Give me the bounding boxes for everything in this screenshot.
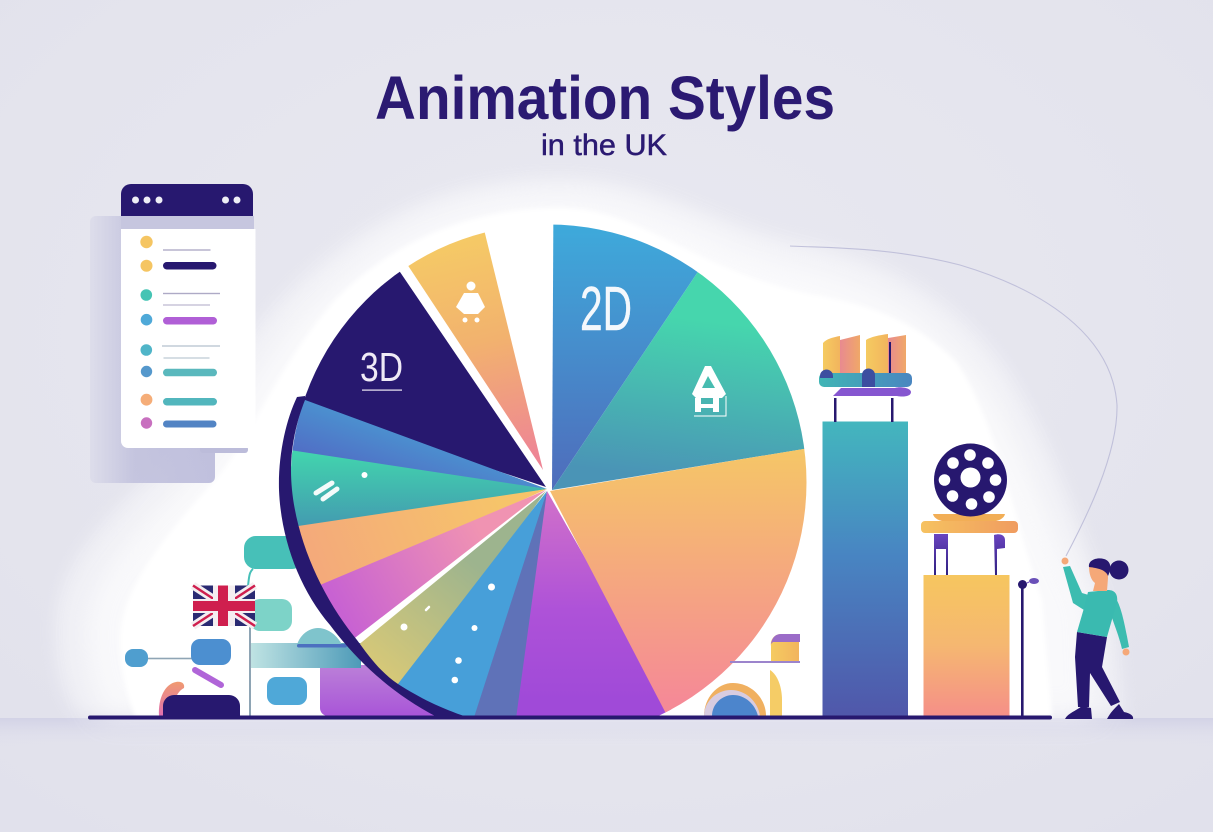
slice: blue left <box>292 400 547 489</box>
slice: teal <box>552 272 804 490</box>
ground line <box>88 716 1052 720</box>
blue node pair <box>125 639 231 667</box>
icon: figure on orange slice <box>456 282 485 322</box>
legend rows <box>140 236 220 429</box>
person hands <box>1062 558 1130 656</box>
icon: dashes and dots on teal slice <box>316 472 368 499</box>
purple pill <box>195 670 221 685</box>
purple box <box>320 665 450 716</box>
icon: bookshelf on tall bar <box>819 334 912 422</box>
person figure <box>1062 558 1133 719</box>
person shoes <box>1065 704 1133 719</box>
yellow sliver <box>770 670 782 716</box>
dome <box>297 628 342 645</box>
flag pole <box>249 626 251 716</box>
panel: legend window <box>90 184 256 483</box>
title: Animation Styles <box>375 64 835 132</box>
slice: 3D <box>305 272 546 487</box>
slice: teal left <box>291 450 547 526</box>
window header <box>121 184 253 216</box>
person legs <box>1075 632 1120 707</box>
person arms <box>1063 566 1129 649</box>
icon: UK flag <box>193 586 255 626</box>
tall bar <box>822 422 908 716</box>
slice: pink <box>321 490 546 638</box>
pie dark crescent rim <box>279 396 467 717</box>
subtitle: in the UK <box>541 129 667 162</box>
person head <box>1089 558 1128 591</box>
short bar <box>924 575 1010 716</box>
slice: top orange <box>408 232 543 470</box>
label: 2D: 2D <box>580 275 632 344</box>
slice: slate blue <box>474 491 547 716</box>
label: 3D: 3D <box>360 344 403 390</box>
person torso <box>1077 590 1117 637</box>
icon: house on teal slice <box>692 366 726 416</box>
small box on shelf <box>730 634 800 663</box>
microphone stand <box>1018 578 1039 716</box>
orange arc <box>159 682 184 716</box>
teal node <box>244 536 304 569</box>
blue node <box>267 677 307 705</box>
window body <box>121 229 256 448</box>
table on pedestal <box>921 521 1018 575</box>
slice: 2D <box>552 224 698 490</box>
panel shadow <box>90 216 254 483</box>
floor shadow band <box>0 718 1213 748</box>
slice: olive <box>360 491 546 684</box>
rainbow arc <box>704 683 766 716</box>
icon: film reel on pedestal <box>933 444 1007 523</box>
slice: light orange <box>298 489 547 584</box>
slice: purple <box>516 491 672 716</box>
thin curved string <box>790 246 1117 556</box>
left cluster of UI shapes <box>125 536 450 717</box>
teal band <box>251 643 361 668</box>
dots on lower slices <box>400 584 495 683</box>
light teal node <box>250 599 292 631</box>
pie chart <box>291 224 806 716</box>
slice: large orange <box>550 448 806 712</box>
white background blob <box>55 178 1125 716</box>
dark pill <box>163 695 240 717</box>
slice: blue <box>398 491 547 716</box>
infographic canvas <box>0 74 1213 728</box>
